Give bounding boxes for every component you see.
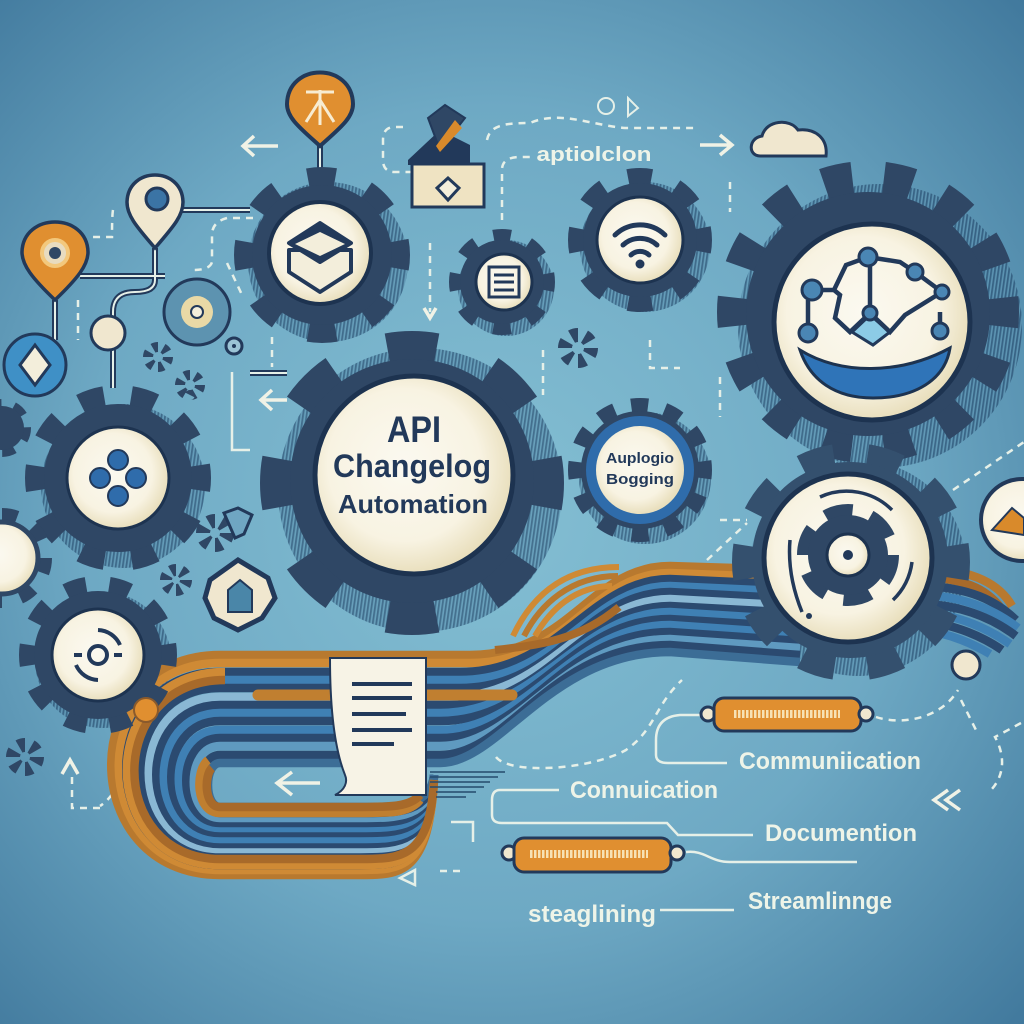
arrow: down to gear <box>424 308 436 318</box>
small decorative gears <box>13 335 591 769</box>
icon: target <box>74 630 122 680</box>
title: API <box>387 409 441 450</box>
gear: left edge <box>0 514 46 602</box>
label: app logging <box>606 450 674 488</box>
gear: main <box>278 349 546 617</box>
dashed connector lines <box>72 118 1024 910</box>
icon: orange pin top <box>287 72 353 146</box>
hatch below bundle <box>430 772 505 797</box>
icon: network and blue smile <box>799 248 950 398</box>
icon: layered box <box>289 223 351 292</box>
orange overlays <box>127 672 434 865</box>
icon: shield emblem <box>205 560 275 630</box>
gear: top right large <box>734 178 1002 446</box>
icon: list <box>489 267 519 297</box>
icon: envelope with hammer <box>408 105 484 207</box>
title: Automation <box>338 489 488 519</box>
cream node <box>952 651 980 679</box>
gear: left four circles <box>36 396 200 560</box>
document <box>330 658 426 795</box>
title <box>333 409 491 519</box>
label: application: aptiolclon <box>536 144 652 166</box>
gear: top centre box <box>245 178 399 332</box>
label: communication left: Connuication <box>570 777 718 804</box>
pill: communication <box>701 698 873 731</box>
icon: cream pin <box>127 175 183 248</box>
right edge badge <box>981 479 1024 561</box>
arrow: to main gear <box>261 390 287 410</box>
gear: small document <box>456 236 548 328</box>
icon: node circle <box>91 316 125 350</box>
label: app logging: Bogging <box>606 471 674 488</box>
gear: blue ring <box>577 407 703 533</box>
icon: small heart <box>224 508 252 538</box>
icon: small target top <box>598 98 638 116</box>
orange node on cable <box>134 698 158 722</box>
arrow: top left <box>243 136 278 156</box>
label: communication right: Communiication <box>739 748 921 775</box>
right side continuation <box>925 568 1012 606</box>
arrow: top right <box>700 135 732 155</box>
icon: disc <box>164 279 230 345</box>
label: documentation: Documention <box>765 820 917 847</box>
label: app logging: Auplogio <box>606 450 674 467</box>
label: steaglining: steaglining <box>528 901 656 928</box>
icon: ring dot <box>226 338 242 354</box>
icon: cloud <box>751 122 826 156</box>
icon: clustered circles <box>90 450 146 506</box>
gear: lower right <box>745 456 957 668</box>
gear: wifi <box>578 178 702 302</box>
gear: upper left edge <box>0 404 26 452</box>
icon: wifi <box>615 225 665 266</box>
cable loop <box>111 566 1018 875</box>
icon: blue circle <box>4 334 66 396</box>
icon: inner gear <box>790 491 912 619</box>
arrow: bottom triangle <box>400 870 415 885</box>
icon: orange pin left <box>22 222 88 300</box>
arrow: double chevron <box>934 790 960 810</box>
title: Changelog <box>333 448 491 484</box>
arrow: small up <box>62 760 78 774</box>
arrow: loop <box>277 772 320 795</box>
gear: lower left <box>28 585 168 725</box>
solid pin connectors <box>55 145 320 388</box>
pill: streamlining <box>502 838 684 872</box>
label: streamlinage: Streamlinnge <box>748 888 892 915</box>
gear hatch shadows <box>35 182 1022 728</box>
